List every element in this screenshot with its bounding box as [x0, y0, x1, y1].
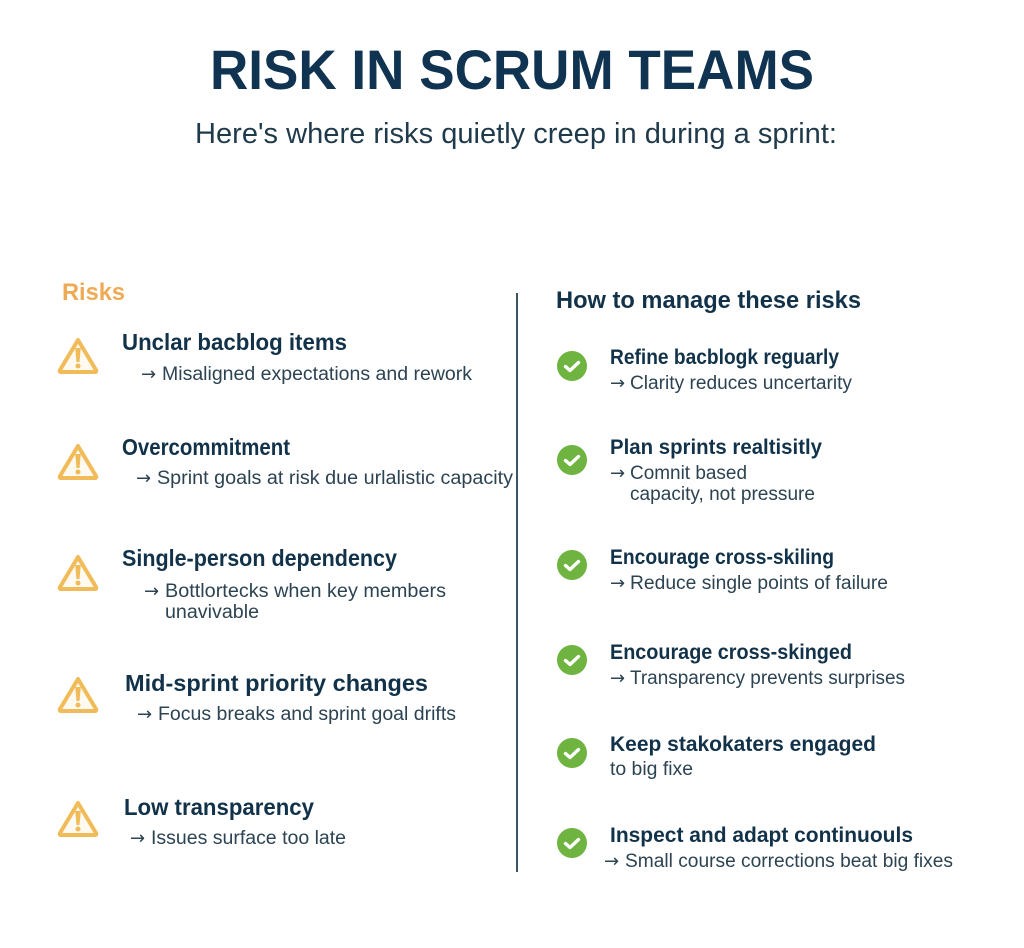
action item: inspect and adapt: → [604, 851, 619, 872]
action item: transparency [557, 641, 905, 689]
action item: stakeholders [557, 733, 876, 780]
action item: transparency: Encourage cross-skinged [610, 641, 852, 664]
panel: how to manage [556, 287, 953, 872]
action item: plan sprints: Comnit based [630, 463, 747, 484]
panel: risks [60, 279, 514, 849]
risk item: overcommitment: Overcommitment [122, 434, 290, 460]
action item: cross-skilling: → [610, 573, 625, 594]
risk item: single-person dependency: → [144, 581, 159, 602]
action item: refine backlog: → [610, 373, 625, 394]
action item: inspect and adapt: Small course corrections beat big fixes [625, 851, 953, 872]
risk item: mid-sprint priority changes: Focus breaks and sprint goal drifts [158, 704, 456, 725]
risk item: single-person dependency [60, 545, 446, 623]
risk item: overcommitment [60, 434, 514, 489]
risk item: mid-sprint priority changes [60, 670, 456, 725]
manage heading: How to manage these risks [556, 287, 861, 314]
action item: refine backlog: Clarity reduces uncertarity [630, 373, 852, 394]
risk item: low transparency: Issues surface too late [151, 828, 346, 849]
risk item: unclear backlog: → [141, 364, 156, 385]
action item: cross-skilling: Encourage cross-skiling [610, 546, 834, 569]
title: RISK IN SCRUM TEAMS [210, 38, 814, 101]
action item: stakeholders: Keep stakokaters engaged [610, 733, 876, 756]
action item: inspect and adapt: Inspect and adapt continuouls [610, 824, 913, 847]
risk item: overcommitment: → [136, 468, 151, 489]
action item: transparency: Transparency prevents surprises [630, 668, 905, 689]
risk item: low transparency: → [130, 828, 145, 849]
action item: transparency: → [610, 668, 625, 689]
risk item: mid-sprint priority changes: Mid-sprint priority changes [125, 670, 428, 696]
risk item: single-person dependency: Single-person dependency [122, 545, 397, 571]
risk item: single-person dependency: Bottlortecks when key members [165, 581, 446, 602]
risk item: single-person dependency: unavivable [165, 602, 259, 623]
risk item: overcommitment: Sprint goals at risk due urlalistic capacity [157, 468, 514, 489]
action item: plan sprints: Plan sprints realtisitly [610, 436, 822, 459]
action item: plan sprints: capacity, not pressure [630, 484, 815, 505]
action item: refine backlog: Refine bacblogk reguarly [610, 346, 839, 369]
action item: stakeholders: to big fixe [610, 759, 693, 780]
action item: cross-skilling [557, 546, 888, 594]
action item: plan sprints: → [610, 463, 625, 484]
risk item: mid-sprint priority changes: → [137, 704, 152, 725]
action item: plan sprints [557, 436, 822, 505]
action item: cross-skilling: Reduce single points of failure [630, 573, 888, 594]
risk item: unclear backlog [60, 329, 473, 385]
risk item: low transparency: Low transparency [124, 794, 314, 820]
risk item: low transparency [60, 794, 346, 849]
risks heading: Risks [62, 279, 125, 306]
action item: refine backlog [557, 346, 852, 394]
subtitle: Here's where risks quietly creep in during a sprint: [195, 118, 837, 150]
action item: inspect and adapt [557, 824, 953, 872]
risk item: unclear backlog: Misaligned expectations and rework [162, 364, 473, 385]
risk item: unclear backlog: Unclar bacblog items [122, 329, 347, 355]
